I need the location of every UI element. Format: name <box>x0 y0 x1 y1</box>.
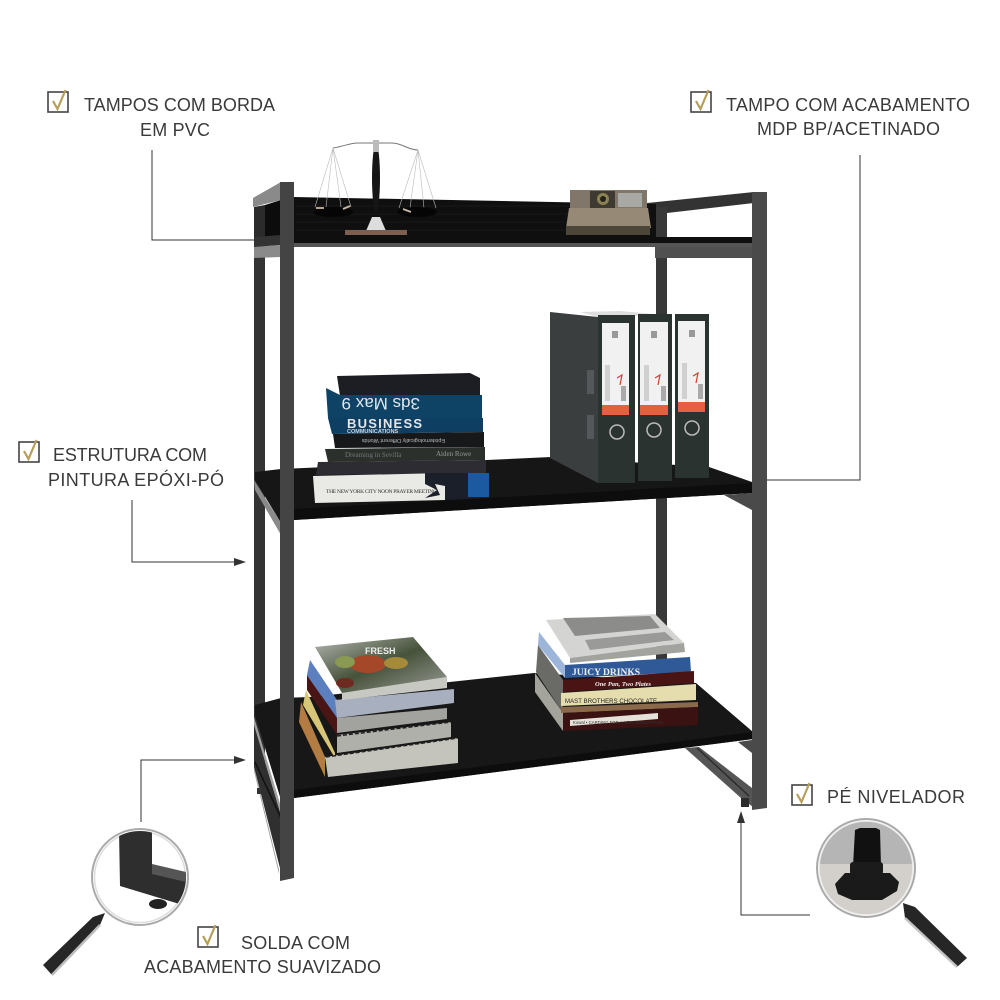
scale ornament <box>313 140 437 235</box>
label: estrutura com pintura: PINTURA EPÓXI-PÓ <box>48 469 224 490</box>
book stack: middle shelf: COMMUNICATIONS <box>347 429 399 435</box>
leader line: tampo com acabamento <box>766 155 860 480</box>
label: pé nivelador: PÉ NIVELADOR <box>827 787 965 807</box>
back left post <box>254 207 265 767</box>
binder side <box>550 312 598 483</box>
book stack: middle shelf: 3ds Max 9 <box>342 394 420 413</box>
book stack: lower right: MAST BROTHERS CHOCOLATE <box>565 699 657 705</box>
label: tampo com acabamento: TAMPO COM ACABAMENTO <box>726 95 970 115</box>
magnifier: pé nivelador detail <box>815 819 967 967</box>
leader line: tampos com borda <box>152 150 254 240</box>
projector ornament <box>566 190 651 235</box>
book stack: lower right: Kowal • CARDING FOR A NEW GENERATION <box>573 720 663 725</box>
book stack: middle shelf: Dreaming in Sevilla <box>345 451 402 459</box>
middle shelf <box>254 457 752 535</box>
shelf unit <box>253 182 767 881</box>
arrow: solda <box>141 756 246 822</box>
label: pé nivelador <box>792 783 965 807</box>
label: solda com acabamento suavizado: ACABAMENTO SUAVIZADO <box>144 957 381 977</box>
book stack: middle shelf: Aiden Rowe <box>436 450 471 458</box>
back right post <box>656 205 667 680</box>
bottom shelf <box>254 673 753 874</box>
book stack: middle shelf: BUSINESS <box>347 416 422 431</box>
book stack: lower right <box>535 614 698 731</box>
book stack: middle shelf <box>313 373 489 503</box>
label: tampos com borda em PVC <box>48 90 275 140</box>
top shelf <box>294 197 754 247</box>
magnifier: solda detail <box>43 829 188 975</box>
arrow: pé nivelador <box>737 811 810 915</box>
binder 2 <box>638 314 672 481</box>
book stack: lower right: JUICY DRINKS <box>572 668 640 678</box>
top left side rail <box>253 182 281 258</box>
book stack: lower right: One Pan, Two Plates <box>595 681 652 688</box>
book stack: middle shelf: THE NEW YORK CITY NOON PRAYER MEETING <box>326 489 437 495</box>
label: tampos com borda em PVC: EM PVC <box>140 120 210 140</box>
label: tampos com borda em PVC: TAMPOS COM BORDA <box>84 95 275 115</box>
front right post <box>752 192 767 810</box>
label: solda com acabamento suavizado <box>144 925 381 977</box>
label: solda com acabamento suavizado: SOLDA COM <box>241 933 350 953</box>
label: estrutura com pintura: ESTRUTURA COM <box>53 445 207 465</box>
top right side rail <box>647 192 754 216</box>
binder 1 <box>598 315 635 483</box>
stacked binders <box>550 311 709 483</box>
arrow: estrutura <box>132 500 246 566</box>
front left post <box>280 182 294 881</box>
label: estrutura com pintura <box>19 440 224 490</box>
label: tampo com acabamento <box>691 90 970 139</box>
label: tampo com acabamento: MDP BP/ACETINADO <box>757 119 940 139</box>
binder 3 <box>675 314 709 478</box>
book stack: lower left: FRESH <box>365 646 396 656</box>
book stack: lower left <box>299 637 458 777</box>
top right lower rail <box>655 247 753 258</box>
book stack: middle shelf: Epistemologically Different Worlds <box>362 437 445 443</box>
